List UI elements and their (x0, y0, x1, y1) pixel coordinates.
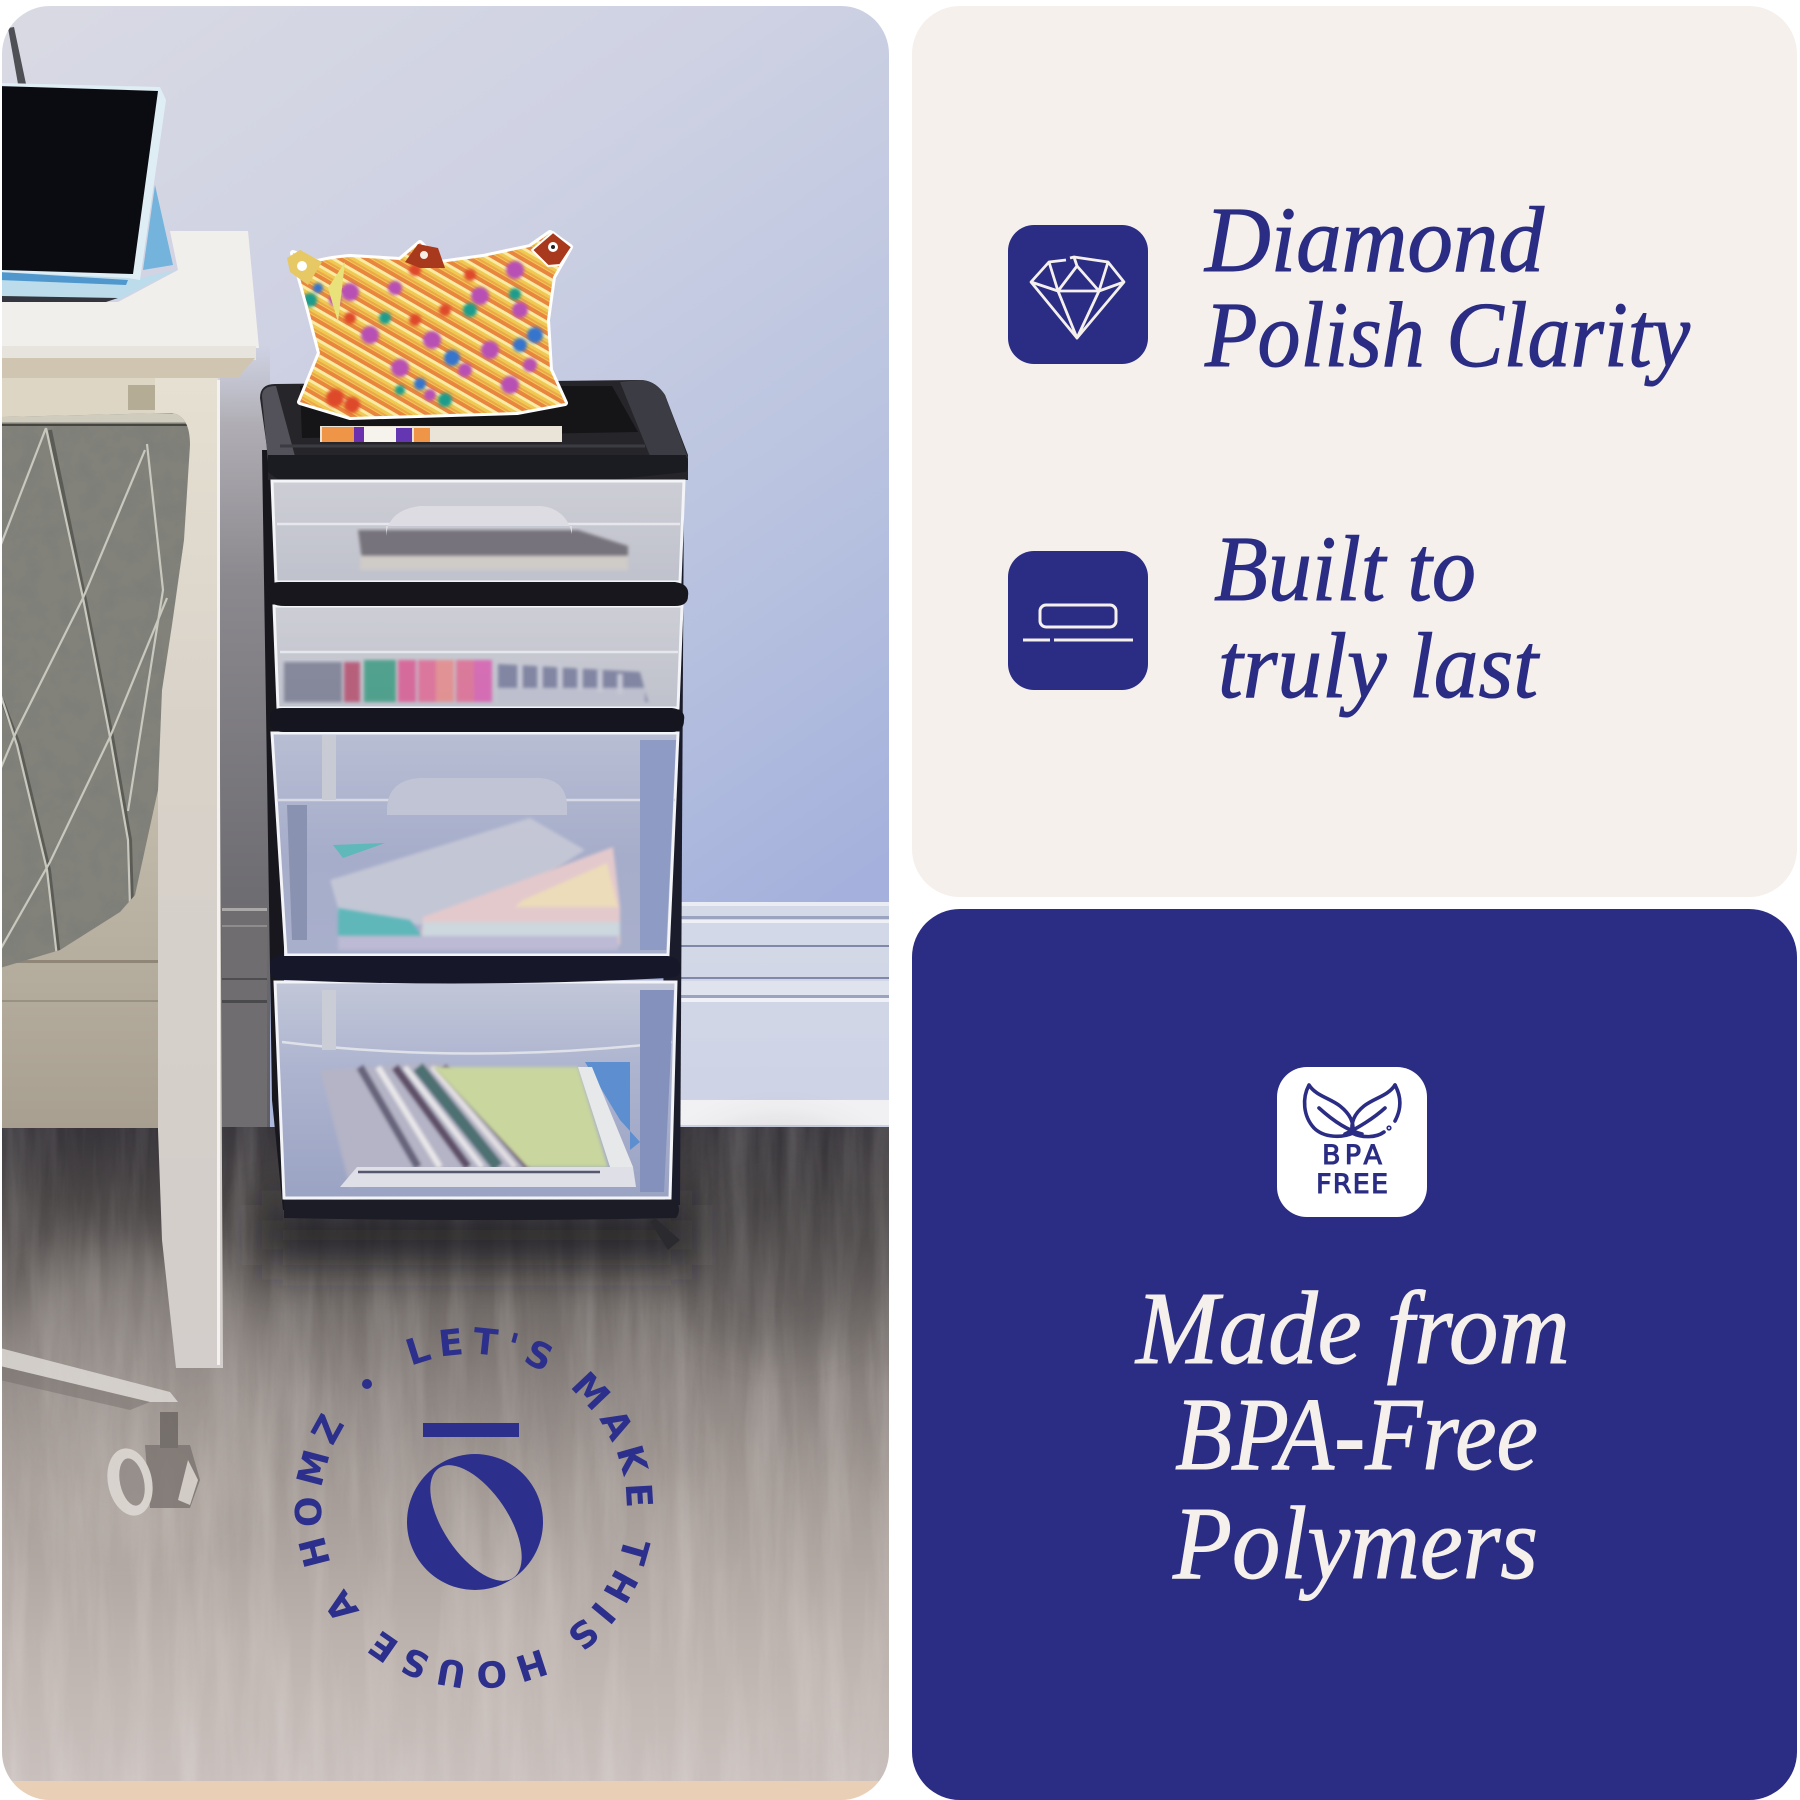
icon: slim drawer (1008, 551, 1148, 690)
drawer 3: clear pencil case (330, 818, 585, 925)
badge: text (1316, 1140, 1388, 1200)
badge: text: FREE (1316, 1169, 1388, 1200)
drawer 3: teal tab (333, 843, 385, 858)
cabinet: drawer 1 (272, 481, 684, 582)
drawer 3: pastel paper stack (338, 847, 620, 950)
cabinet: zipper pouch (285, 230, 580, 425)
logo: circular slogan: LET'S MAKE THIS HOUSE A HOMZ (294, 1327, 654, 1688)
photo: right baseboard (670, 902, 890, 1128)
cabinet: drawer 3 (272, 733, 678, 955)
panel: features (912, 6, 1797, 897)
cabinet: top tray (260, 380, 688, 481)
photo: desk leg (155, 378, 223, 1368)
photo: shadowed baseboard left (222, 905, 267, 1127)
photo: quilted chair back (0, 410, 195, 970)
heading: Diamond Polish Clarity (1203, 189, 1691, 387)
badge: twin leaves (1305, 1085, 1400, 1137)
logo: letter O mark (407, 1454, 543, 1590)
drawer 2: dark markers (284, 662, 342, 702)
logo: ring dot (362, 1379, 372, 1389)
photo: desk leg front highlight (217, 380, 220, 1365)
heading: Built to truly last: Built to (1214, 518, 1476, 621)
drawer 4: bottom white book (340, 1167, 636, 1187)
photo: beige strip at bottom (0, 1781, 900, 1800)
panel: product photo (0, 0, 900, 1800)
heading: Made from BPA-Free Polymers: Polymers (1172, 1486, 1538, 1601)
heading: Built to truly last (1214, 518, 1540, 718)
photo: four-drawer storage cabinet (260, 230, 688, 1250)
cabinet: markers under pouch (320, 426, 562, 442)
cabinet: drawer 2 (274, 606, 682, 708)
heading: Diamond Polish Clarity: Polish Clarity (1204, 284, 1691, 387)
heading: Built to truly last: truly last (1218, 615, 1540, 718)
panel: BPA free (912, 909, 1797, 1800)
heading: Made from BPA-Free Polymers: Made from (1134, 1271, 1570, 1386)
heading: Made from BPA-Free Polymers (1134, 1271, 1570, 1601)
drawer 4: green notebook (433, 1067, 608, 1167)
cabinet: drawer rims (268, 582, 688, 1250)
heading: Diamond Polish Clarity: Diamond (1203, 189, 1544, 292)
photo: chair base and caster (0, 1348, 200, 1520)
photo: shadowed wall beside desk leg (220, 345, 270, 1130)
icon: diamond (1008, 225, 1148, 364)
photo: desk top (0, 231, 259, 418)
logo badge: Let's make this house a Homz (294, 1327, 654, 1688)
drawer 4: blue folders (585, 1062, 640, 1150)
icon: BPA free badge (1277, 1067, 1427, 1217)
pouch: right tab (532, 232, 572, 266)
cabinet: drawer 4 (275, 982, 676, 1198)
cabinet: black side frame (262, 450, 284, 1210)
pouch: middle tab (405, 244, 445, 268)
drawer 2: colored markers (344, 660, 492, 702)
pouch: left tab (287, 250, 322, 285)
cabinet: right side frame (663, 520, 684, 1205)
logo: macron bar (423, 1423, 519, 1437)
heading: Made from BPA-Free Polymers: BPA-Free (1175, 1377, 1538, 1492)
drawer 2: grey-blue pens (498, 662, 648, 702)
photo: wall (0, 0, 900, 1130)
photo: tablet on stand (0, 27, 176, 302)
photo: desk lower panel (0, 780, 165, 1128)
badge: text: BPA (1322, 1140, 1383, 1171)
drawer 4: striped notebook (320, 1062, 530, 1187)
photo: wood floor (0, 1127, 900, 1782)
